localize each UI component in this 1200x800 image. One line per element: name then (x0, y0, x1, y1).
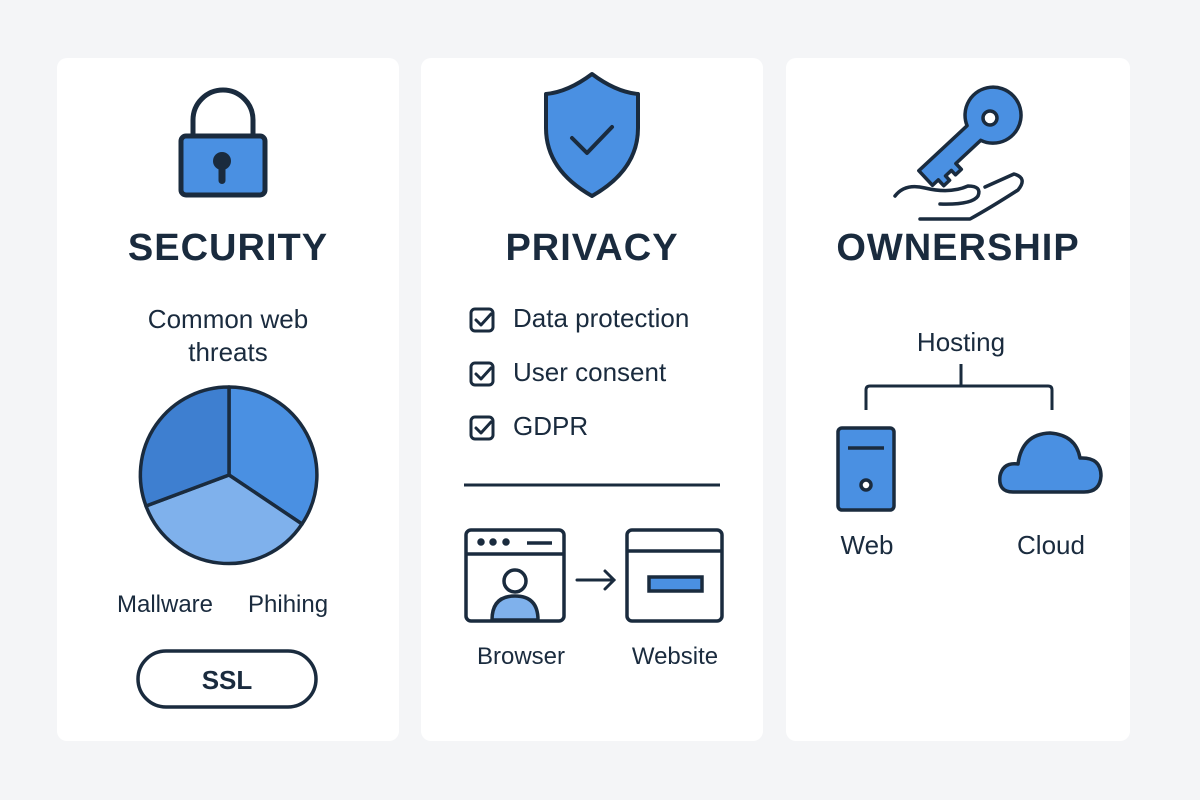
panel: ownership (786, 58, 1130, 741)
labels: Browser (477, 643, 565, 670)
badge: SSL (138, 651, 316, 707)
arrow (577, 571, 614, 589)
checklist: GDPR (513, 411, 588, 441)
hosting tree (866, 327, 1052, 410)
heading: security: SECURITY (128, 227, 328, 269)
icon: padlock (181, 90, 265, 195)
text: common web threats: Common web (148, 304, 308, 334)
labels (477, 643, 718, 670)
icon: key in hand (895, 76, 1033, 219)
panel: privacy (421, 58, 763, 741)
panel: security (57, 58, 399, 741)
pie chart (140, 387, 317, 564)
icon: cloud (1000, 433, 1101, 492)
icon: shield (546, 74, 638, 196)
icon: browser (466, 530, 564, 621)
checklist (471, 303, 689, 441)
labels: Cloud (1017, 530, 1085, 560)
badge: SSL: SSL (202, 665, 252, 695)
icon: server (838, 428, 894, 510)
hosting tree: Hosting (917, 327, 1005, 357)
checklist: User consent (513, 357, 667, 387)
heading: ownership: OWNERSHIP (836, 227, 1080, 269)
labels: Web (840, 530, 894, 560)
icon: website (627, 530, 722, 621)
heading: privacy: PRIVACY (505, 227, 679, 269)
labels: Website (632, 643, 718, 670)
text: common web threats: threats (188, 337, 268, 367)
legend labels: Phihing (248, 591, 328, 618)
labels (840, 530, 1085, 560)
legend labels: Mallware (117, 591, 213, 618)
checklist: Data protection (513, 303, 689, 333)
legend labels (117, 591, 328, 618)
